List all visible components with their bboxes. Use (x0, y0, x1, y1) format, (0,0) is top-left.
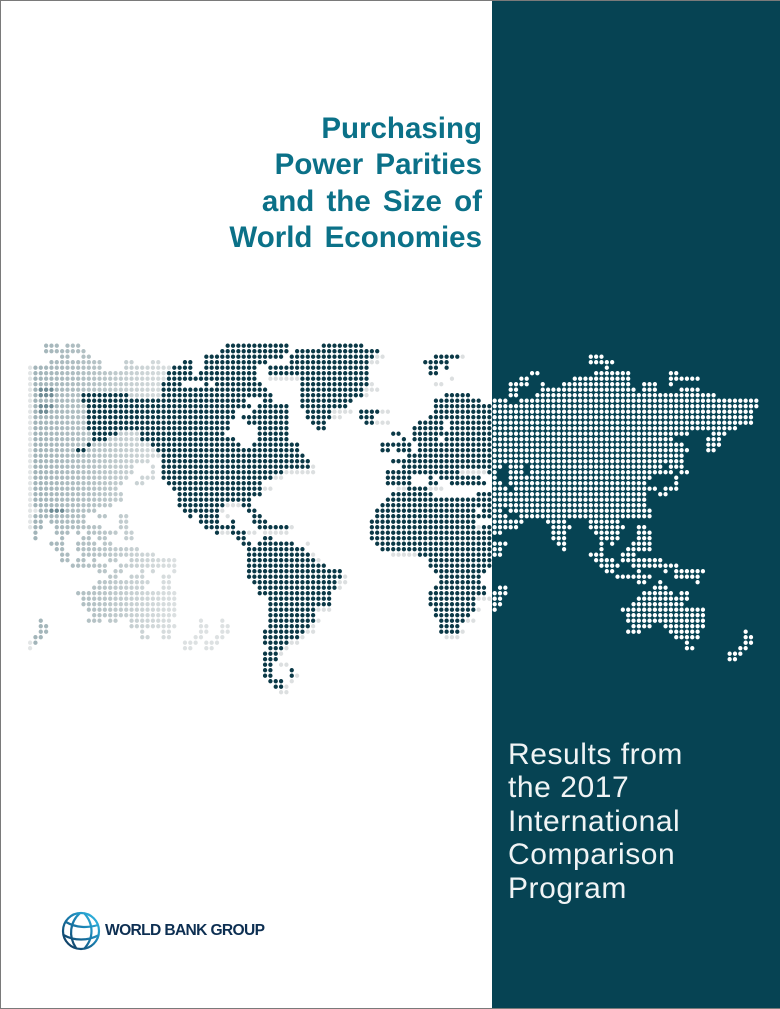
subtitle: Results from (508, 738, 683, 770)
subtitle: International (508, 804, 680, 838)
icon: globe (62, 912, 100, 950)
subtitle: the 2017 (508, 771, 629, 804)
subtitle: Comparison (508, 838, 675, 871)
map edge: pale shadow dots (222, 357, 489, 692)
title: and the Size of (262, 185, 482, 218)
logo wordmark: WORLD BANK GROUP (105, 922, 264, 939)
panel: dark teal right column (492, 0, 780, 1009)
map: Americas and Greenland dots (78, 346, 377, 687)
subtitle (508, 738, 683, 904)
title (229, 112, 482, 254)
ghosted map: faded left-hand reflection (30, 346, 228, 648)
map: Iceland, Europe and Africa dots (372, 357, 489, 632)
map: Asia and Oceania dots on dark panel (495, 357, 756, 659)
title: World Economies (229, 221, 482, 254)
subtitle: Program (508, 872, 627, 904)
title: Power Parities (275, 148, 482, 181)
logo: World Bank Group (62, 912, 264, 950)
title: Purchasing (321, 112, 482, 145)
